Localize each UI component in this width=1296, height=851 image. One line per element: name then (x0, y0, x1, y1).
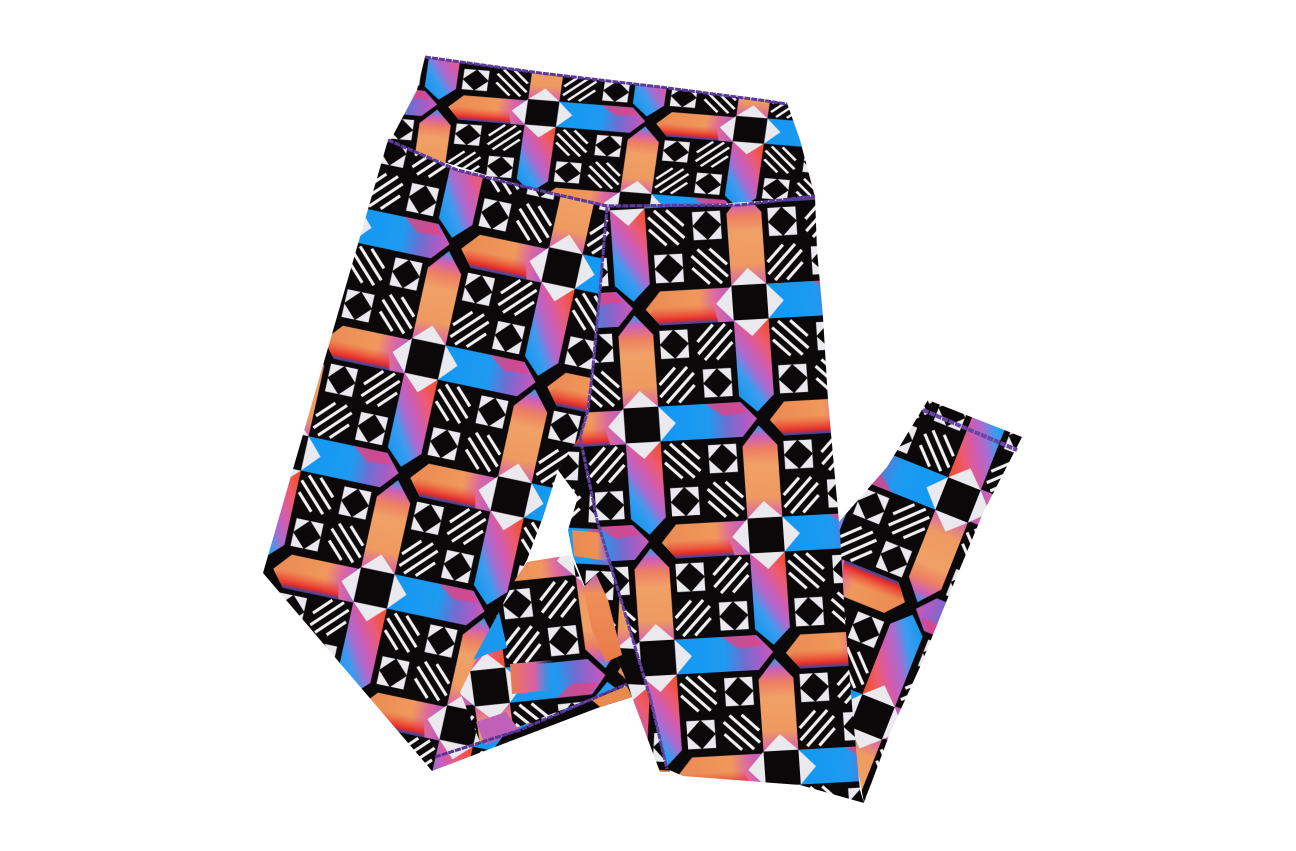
panel: inner back leg strip (558, 428, 670, 772)
panel: folded lower section with hem (435, 555, 632, 757)
panel: front leg and front waistband (580, 196, 864, 803)
panel: back waistband (388, 57, 815, 212)
panel: left leg (263, 140, 632, 771)
panel: lower calf and cuff of far leg (838, 400, 1022, 803)
seam: inner leg stitching (580, 207, 667, 769)
seam: front waistband stitching (388, 140, 815, 206)
